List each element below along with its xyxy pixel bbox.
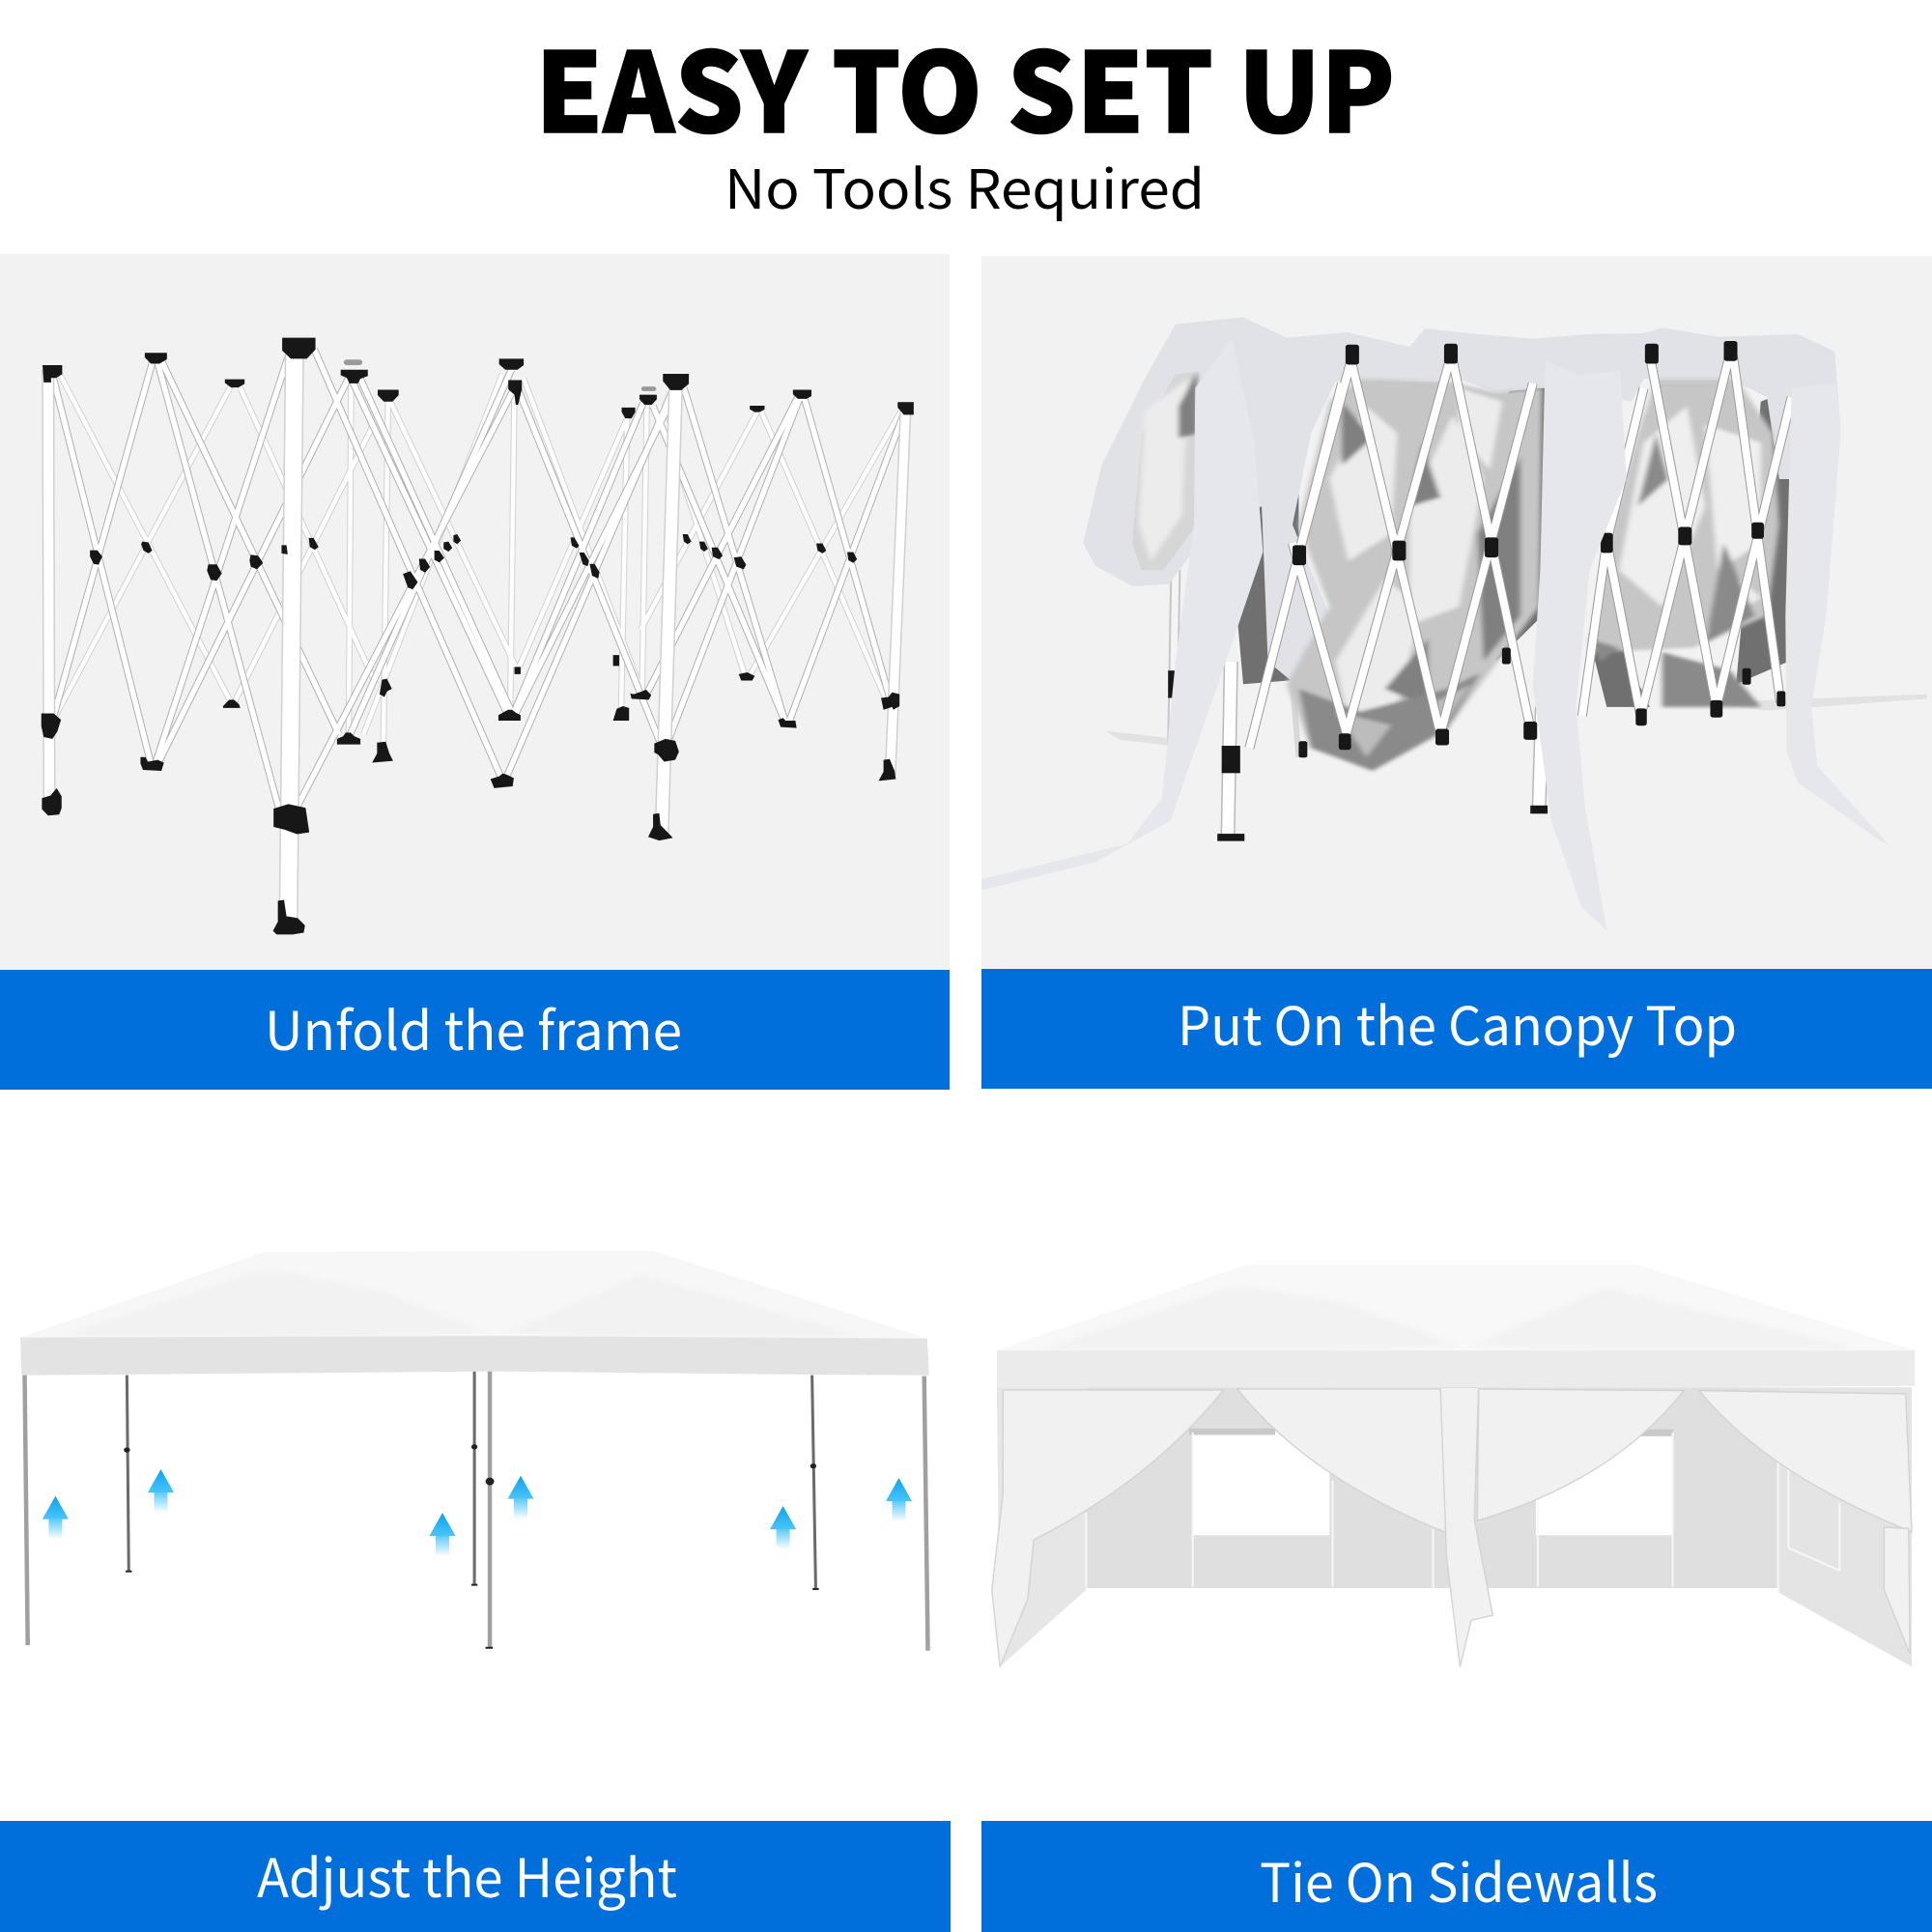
caption bar: Put On the Canopy Top bbox=[1178, 983, 1737, 1061]
frame illustration bbox=[42, 338, 914, 934]
pole knobs bbox=[344, 359, 656, 391]
wall seams bbox=[1086, 1433, 1839, 1594]
panel: unfold the frame bbox=[0, 254, 950, 1090]
silver fabric bulges bbox=[1139, 372, 1779, 771]
front poles and front arms bbox=[48, 347, 906, 925]
canopy valance bbox=[20, 1336, 929, 1376]
back poles and back arms bbox=[55, 374, 902, 757]
panel background bbox=[981, 256, 1932, 969]
door curtains bbox=[992, 1387, 1912, 1666]
black joints, brackets and feet bbox=[42, 338, 914, 934]
panel: put on the canopy top bbox=[981, 256, 1932, 1089]
upper fabric bbox=[1083, 317, 1841, 682]
title: EASY TO SET UP bbox=[535, 5, 1395, 164]
caption bar bbox=[981, 1821, 1932, 1932]
back wall and side walls bbox=[997, 1387, 1912, 1666]
roof creases bbox=[1040, 1285, 1860, 1349]
caption bar: Unfold the frame bbox=[265, 988, 682, 1065]
tent with poles bbox=[20, 1251, 929, 1651]
dark interior bbox=[1237, 370, 1795, 707]
caption bar: Adjust the Height bbox=[257, 1835, 677, 1913]
panel: adjust the height bbox=[0, 1251, 951, 1932]
roof creases bbox=[62, 1268, 863, 1336]
window rolls bbox=[1189, 1429, 1673, 1436]
back legs bbox=[1173, 570, 1743, 757]
canopy roof bbox=[20, 1251, 927, 1343]
canopy valance bbox=[997, 1350, 1915, 1388]
ground fabric bbox=[1105, 695, 1927, 746]
black joints bbox=[1168, 341, 1785, 841]
caption bar bbox=[981, 969, 1932, 1089]
poles bbox=[25, 1372, 928, 1651]
white straps hanging bbox=[981, 338, 1890, 930]
tent with sidewalls bbox=[992, 1264, 1915, 1666]
panel: tie on sidewalls bbox=[981, 1264, 1932, 1932]
caption bar bbox=[0, 970, 950, 1090]
silver fabric, left bbox=[1132, 372, 1199, 570]
subtitle: No Tools Required bbox=[724, 147, 1205, 225]
caption bar bbox=[0, 1821, 951, 1932]
height arrows bbox=[43, 1469, 912, 1556]
scissor trusses bbox=[1228, 354, 1792, 837]
windows bbox=[1193, 1429, 1673, 1535]
caption bar: Tie On Sidewalls bbox=[1260, 1840, 1658, 1918]
pole latches and feet bbox=[124, 1444, 819, 1649]
panel background bbox=[0, 254, 950, 970]
canopy on frame illustration bbox=[981, 317, 1927, 930]
canopy roof bbox=[997, 1264, 1915, 1355]
